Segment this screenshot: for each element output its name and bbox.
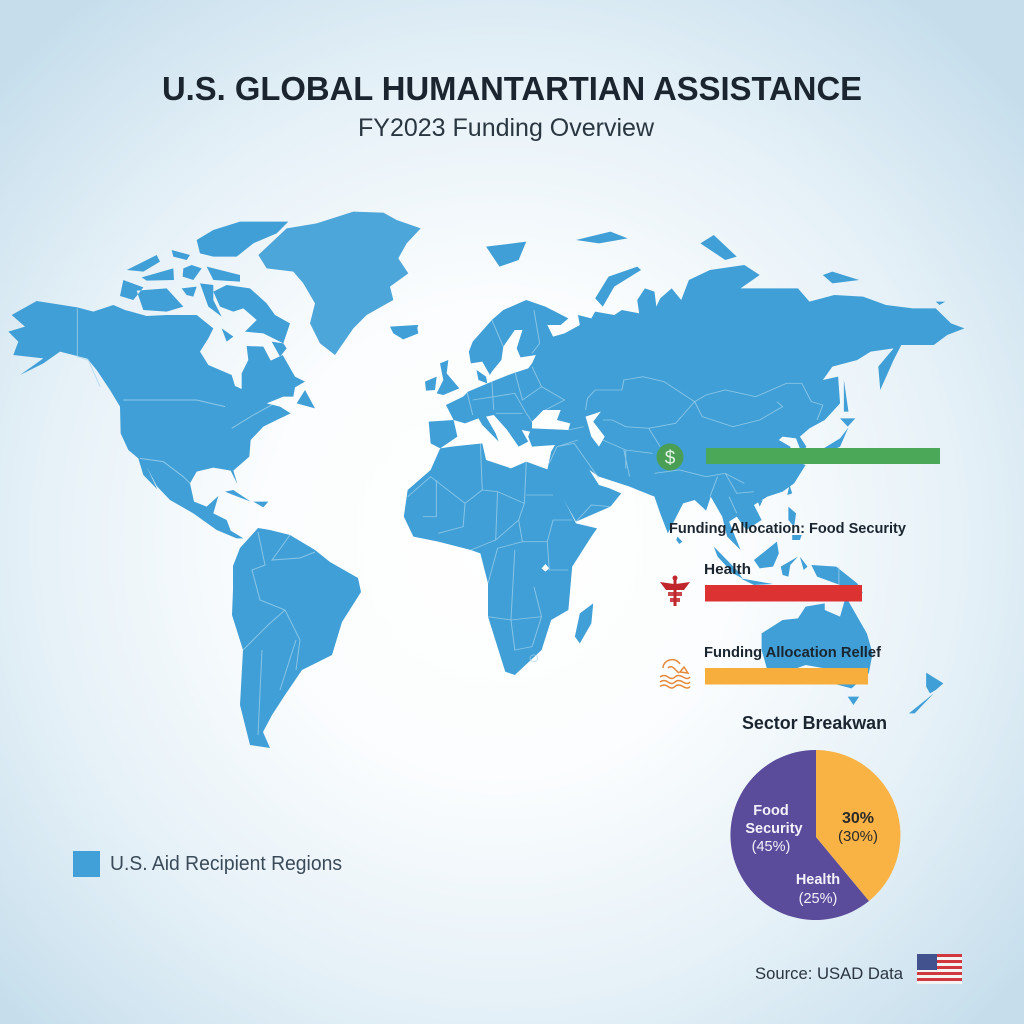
icon: US flag xyxy=(917,954,962,984)
pie label: 25 percent: (25%) xyxy=(799,891,837,907)
map borders: South America xyxy=(243,532,315,735)
icon: dollar: $ xyxy=(665,448,676,469)
map borders: Americas xyxy=(77,308,272,483)
Eurasia xyxy=(429,265,964,550)
title: U.S. GLOBAL HUMANTARTIAN ASSISTANCE xyxy=(162,70,862,107)
pie label: 30 percent bracket: (30%) xyxy=(838,828,878,845)
label: food security: Funding Allocation: Food Security xyxy=(669,520,907,537)
bar: health xyxy=(705,585,862,602)
pie label: 30 percent: 30% xyxy=(842,810,874,827)
Greenland xyxy=(258,212,421,355)
legend text: U.S. Aid Recipient Regions xyxy=(110,853,342,875)
bar: relief xyxy=(705,668,868,684)
pie label: security: Security xyxy=(745,821,803,837)
subtitle: FY2023 Funding Overview xyxy=(358,114,655,142)
New Guinea xyxy=(811,565,863,593)
Africa xyxy=(404,443,597,675)
bar: food security xyxy=(706,448,940,464)
pie label: health: Health xyxy=(796,872,840,888)
pie label: food security: Food xyxy=(753,803,789,819)
Madagascar xyxy=(575,603,593,643)
pie heading: Sector Breakwan xyxy=(742,713,887,733)
label: relief: Funding Allocation Rellef xyxy=(704,644,882,661)
pie label: 45 percent: (45%) xyxy=(752,839,790,855)
source text: Source: USAD Data xyxy=(755,964,904,983)
pie chart xyxy=(730,750,900,920)
label: health: Health xyxy=(704,561,751,578)
Iceland and British Isles xyxy=(390,325,459,395)
legend swatch xyxy=(73,851,100,877)
map borders: Old World xyxy=(408,310,839,662)
Arctic islands xyxy=(120,222,315,408)
New Zealand xyxy=(909,673,943,713)
Australia xyxy=(762,597,873,705)
world map xyxy=(8,212,964,748)
icon: waves xyxy=(660,660,690,688)
Asian and Arctic islands xyxy=(400,232,945,544)
map: Americas and Arctic xyxy=(8,212,459,538)
map: Eurasia, Africa, Oceania xyxy=(400,232,964,713)
icon: caduceus xyxy=(660,576,690,606)
North America xyxy=(8,301,305,538)
Southeast Asian islands xyxy=(714,507,808,585)
icon: dollar xyxy=(656,444,684,470)
Caribbean islands xyxy=(225,490,268,507)
South America xyxy=(232,528,361,748)
